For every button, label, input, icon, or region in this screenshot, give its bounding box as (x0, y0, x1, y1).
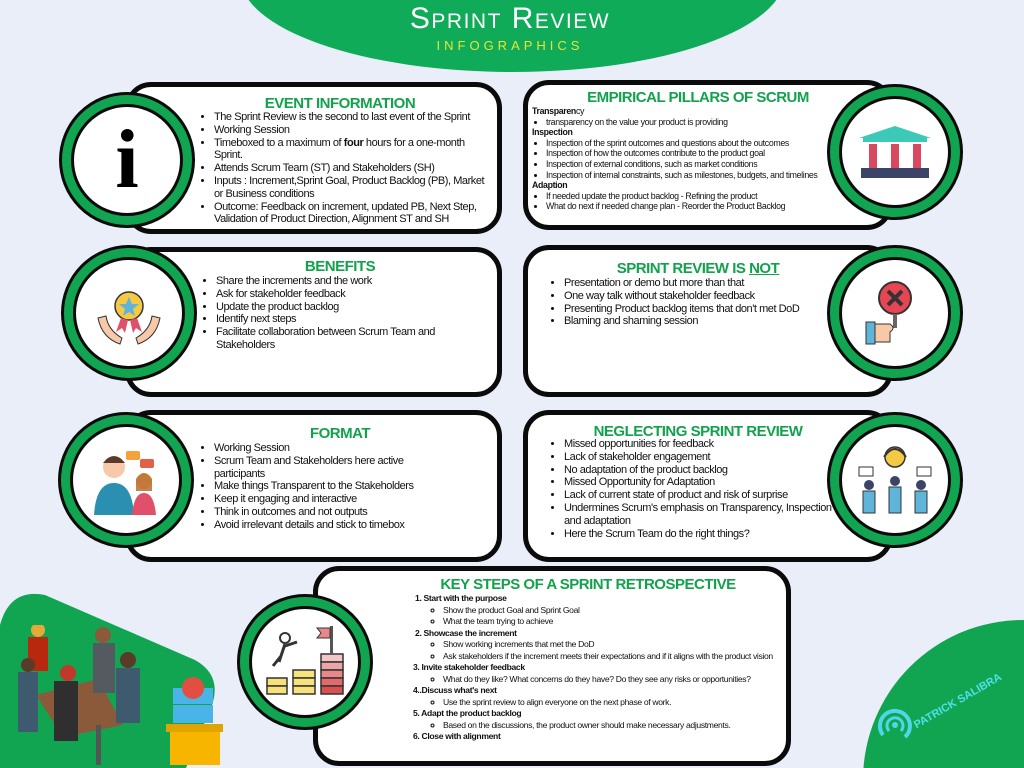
text block: Inspection of external conditions, such as market conditions (546, 159, 757, 169)
text block: Timeboxed to a maximum of four hours for a one-month Sprint. (214, 137, 465, 161)
text block (201, 442, 414, 531)
text block: Show the product Goal and Sprint Goal (443, 604, 580, 614)
text block: transparency on the value your product is providing (546, 117, 728, 127)
text block: Working Session (214, 124, 290, 136)
text block: Missed opportunities for feedback (564, 438, 714, 450)
text block: Inspection of how the outcomes contribute to the product goal (546, 148, 765, 158)
text block: Inspection of the sprint outcomes and questions about the outcomes (546, 138, 789, 148)
logo: patrick salibra (878, 671, 1004, 738)
icon: steps with flag (237, 594, 373, 730)
icon: team (827, 412, 963, 548)
panel: event information (125, 82, 502, 234)
text block: Identify next steps (216, 313, 296, 325)
text block: Update the product backlog (216, 301, 339, 313)
icon: team at desk (18, 625, 223, 765)
text block: 3. Invite stakeholder feedback (413, 662, 525, 672)
icon: pillars (827, 84, 963, 220)
text block (551, 438, 832, 540)
text block: Attends Scrum Team (ST) and Stakeholders (SH) (214, 162, 434, 174)
text block: Lack of stakeholder engagement (564, 451, 710, 463)
heading: SPRINT REVIEW IS NOT (617, 260, 779, 277)
text block: Lack of current state of product and risk of surprise (564, 489, 788, 501)
text block: Facilitate collaboration between Scrum Team and Stakeholders (216, 326, 435, 351)
text block: The Sprint Review is the second to last event of the Sprint (214, 111, 470, 123)
text block (413, 593, 773, 741)
text block: No adaptation of the product backlog (564, 464, 728, 476)
text block: Think in outcomes and not outputs (214, 506, 367, 518)
panel: format (125, 410, 502, 562)
text block (551, 277, 800, 327)
text block: 1. Start with the purpose (415, 593, 507, 603)
text block: Share the increments and the work (216, 275, 372, 287)
icon: no sign (827, 245, 963, 381)
text block: Outcome: Feedback on increment, updated PB, Next Step, Validation of Product Direction, Alignment ST and SH (214, 201, 476, 225)
text block: Undermines Scrum's emphasis on Transparency, Inspection and adaptation (564, 502, 832, 527)
panel: key steps (313, 566, 791, 766)
text block: Blaming and shaming session (564, 315, 698, 327)
text block: Working Session (214, 442, 290, 454)
text block: Ask stakeholders if the increment meets their expectations and if it aligns with the product vision (443, 650, 773, 660)
text block (201, 111, 484, 225)
text block: 2. Showcase the increment (415, 628, 517, 638)
text block: 6. Close with alignment (413, 731, 500, 741)
icon: award hands (61, 245, 197, 381)
text block: What the team trying to achieve (443, 616, 553, 626)
subtitle: INFOGRAPHICS (437, 38, 583, 53)
text block: Based on the discussions, the product owner should make necessary adjustments. (443, 720, 731, 730)
text block: If needed update the product backlog - Refining the product (546, 191, 757, 201)
heading: BENEFITS (305, 258, 375, 275)
heading: NEGLECTING SPRINT REVIEW (594, 423, 802, 440)
text block: Presenting Product backlog items that don't met DoD (564, 303, 799, 315)
icon: info (59, 92, 195, 228)
heading: KEY STEPS OF A SPRINT RETROSPECTIVE (440, 576, 736, 593)
text block: Avoid irrelevant details and stick to timebox (214, 519, 404, 531)
header green ellipse (240, 0, 785, 72)
panel: empirical pillars (523, 80, 893, 230)
icon: people (58, 412, 194, 548)
text block: 5. Adapt the product backlog (413, 708, 521, 718)
text block: One way talk without stakeholder feedback (564, 290, 755, 302)
text block: Use the sprint review to align everyone on the next phase of work. (443, 696, 671, 706)
text block (532, 106, 818, 211)
text block: Inputs : Increment,Sprint Goal, Product Backlog (PB), Market or Business conditions (214, 175, 484, 200)
text block: 4..Discuss what's next (413, 685, 497, 695)
text block: Scrum Team and Stakeholders here active participants (214, 455, 404, 480)
text block: What do they like? What concerns do they have? Do they see any risks or opportunities? (443, 674, 751, 684)
decorative bottom-left blob (0, 594, 215, 768)
text block (203, 275, 435, 351)
text block: Missed Opportunity for Adaptation (564, 476, 715, 488)
logo: patrick salibra: PATRICK SALIBRA (912, 671, 1004, 731)
heading: EVENT INFORMATION (265, 95, 415, 112)
panel: benefits (125, 247, 502, 397)
text block: Ask for stakeholder feedback (216, 288, 345, 300)
text block: Here the Scrum Team do the right things? (564, 528, 749, 540)
text block: Transparency Inspection Adaption (532, 106, 584, 190)
text block: Make things Transparent to the Stakeholders (214, 480, 414, 492)
heading: EMPIRICAL PILLARS OF SCRUM (587, 89, 809, 106)
text block: What do next if needed change plan - Reorder the Product Backlog (546, 201, 785, 211)
title: Sprint Review (410, 2, 610, 35)
text block: Inspection of internal constraints, such as milestones, budgets, and timelines (546, 170, 817, 180)
text block: Show working increments that met the DoD (443, 639, 594, 649)
panel: neglecting sprint review (523, 410, 893, 562)
text block: Presentation or demo but more than that (564, 277, 744, 289)
panel: sprint review is not (523, 245, 893, 397)
decorative bottom-right circle (863, 620, 1024, 768)
text block: Keep it engaging and interactive (214, 493, 357, 505)
heading: FORMAT (310, 425, 370, 442)
icon: info: i (115, 113, 139, 206)
